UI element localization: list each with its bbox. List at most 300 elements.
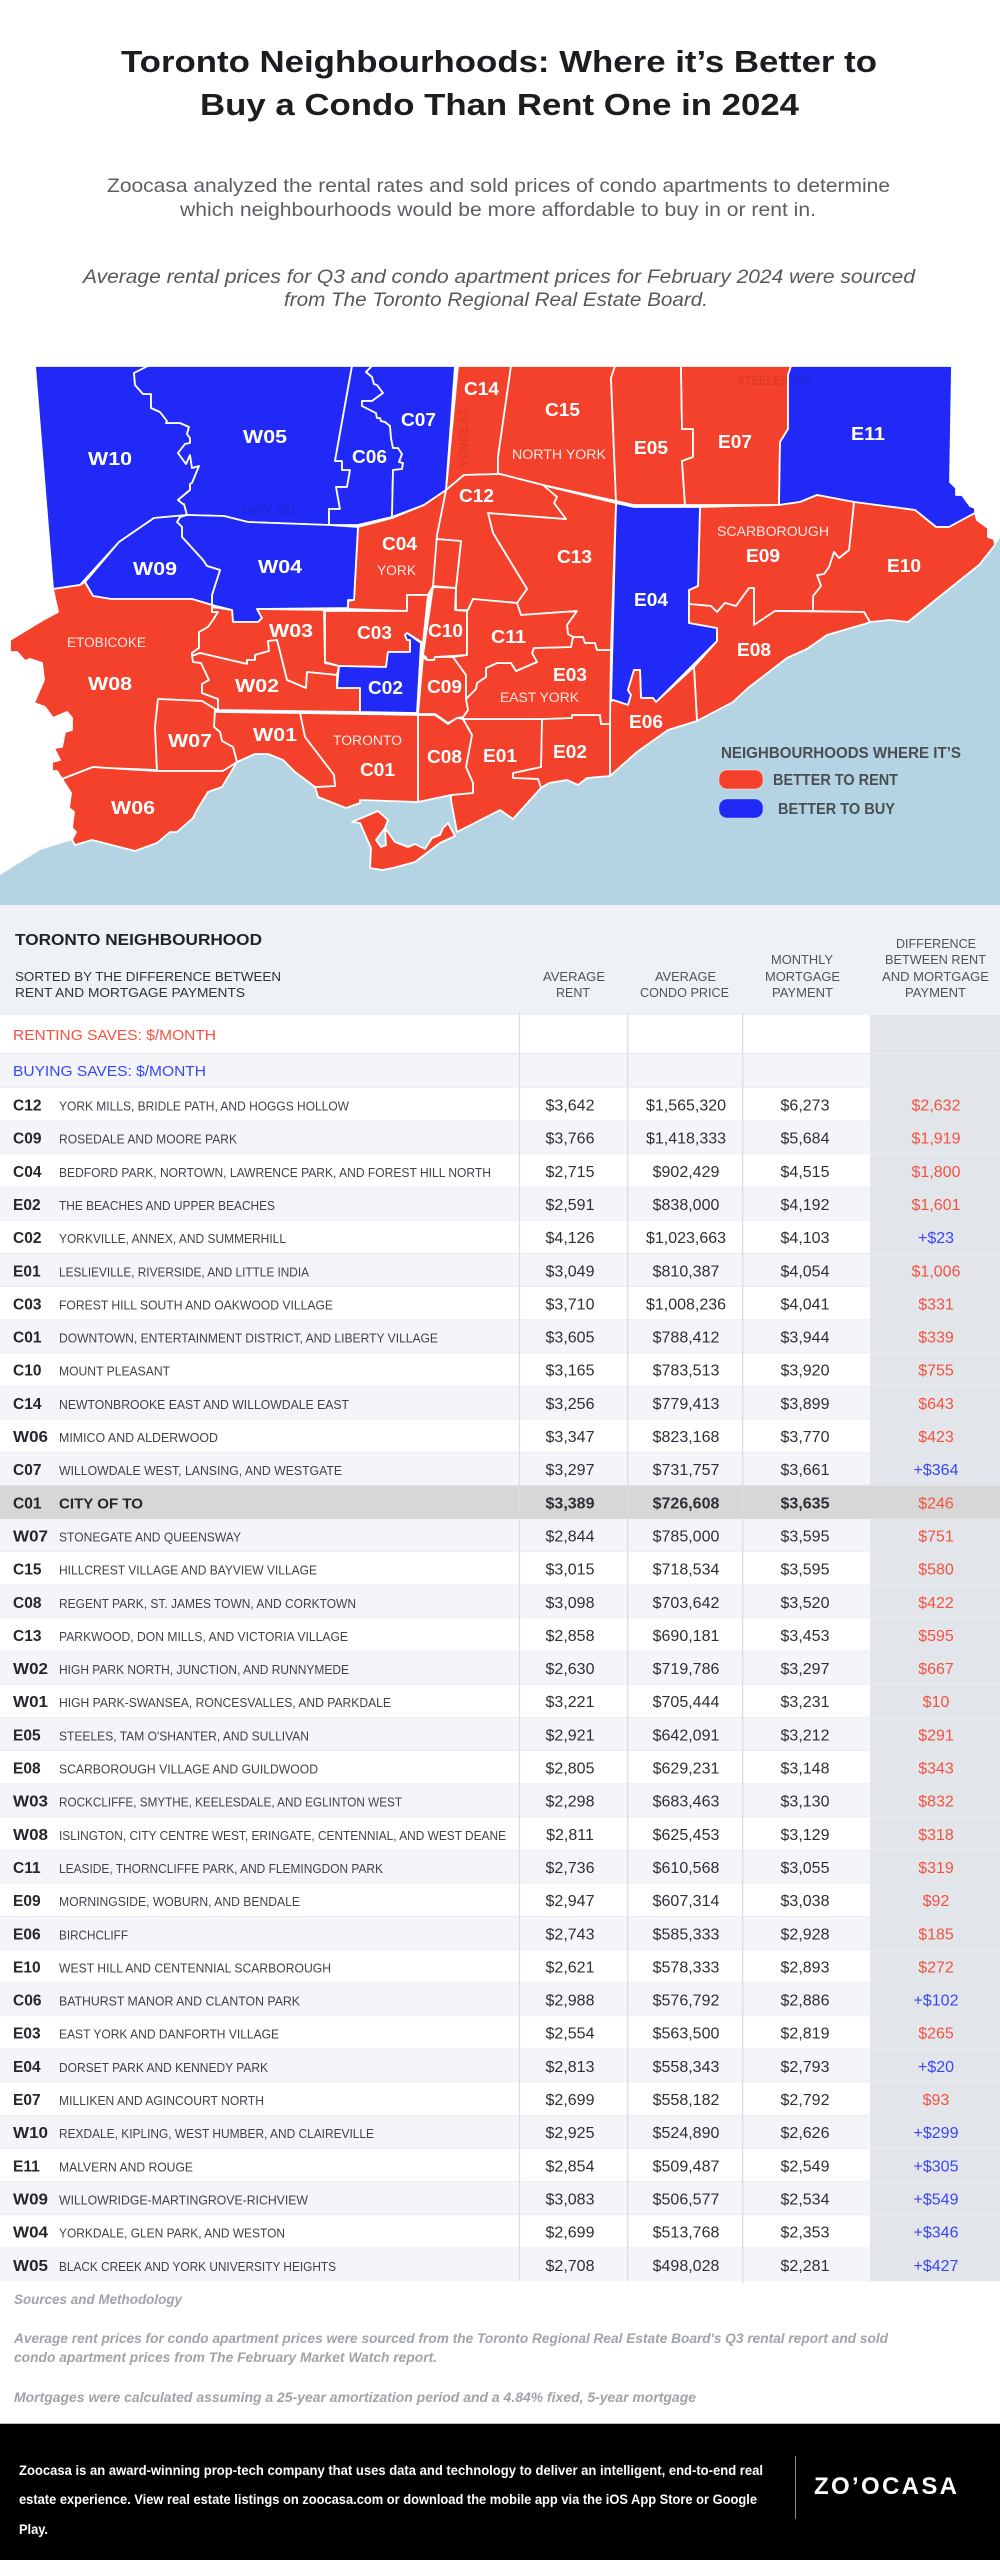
- region: W06: [62, 762, 237, 851]
- row: E06: $2,743: [546, 1926, 595, 1943]
- row: C13: $2,858: [546, 1628, 595, 1645]
- row: C15: HILLCREST VILLAGE AND BAYVIEW VILLAGE: [59, 1564, 317, 1578]
- row: C15: $3,015: [546, 1562, 595, 1579]
- row: E10: [0, 1950, 1000, 1983]
- row: E07: MILLIKEN AND AGINCOURT NORTH: [59, 2094, 264, 2108]
- neighbourhood code labels: C04: [382, 534, 417, 554]
- row: W07: STONEGATE AND QUEENSWAY: [59, 1530, 242, 1544]
- row: W04: +$346: [914, 2225, 959, 2242]
- row: C15: C15: [13, 1562, 42, 1579]
- neighbourhood code labels: C11: [491, 627, 526, 647]
- row: C06: C06: [13, 1993, 42, 2010]
- row: E01: LESLIEVILLE, RIVERSIDE, AND LITTLE INDIA: [59, 1265, 310, 1279]
- row: W08: [0, 1817, 1000, 1850]
- map legend: BETTER TO RENT: [773, 772, 898, 789]
- row: E01: $4,054: [781, 1263, 830, 1280]
- region: C04: [348, 490, 446, 611]
- neighbourhood code labels: E02: [553, 742, 587, 762]
- row: renting saves key: RENTING SAVES: $/MONTH: [13, 1027, 216, 1044]
- row: E08: E08: [13, 1760, 41, 1778]
- row: W01: $3,221: [546, 1694, 595, 1711]
- row: W05: +$427: [914, 2258, 959, 2275]
- row: C03: [0, 1287, 1000, 1320]
- source note: Average rental prices for Q3 and condo apartment prices for February 2024 were sourced: [82, 266, 916, 288]
- row: W05: $2,281: [781, 2258, 830, 2275]
- table header: SORTED BY THE DIFFERENCE BETWEEN: [15, 969, 281, 984]
- neighbourhood code labels: C13: [557, 547, 592, 567]
- neighbourhood code labels: W06: [111, 798, 155, 818]
- region: W08: [10, 582, 218, 779]
- region: C06: [329, 366, 403, 525]
- row: C12: C12: [13, 1098, 41, 1114]
- region: E10: [813, 502, 995, 622]
- row: C07: [0, 1453, 1000, 1486]
- neighbourhood code labels: C01: [360, 760, 395, 780]
- row: W06: $823,168: [653, 1429, 719, 1446]
- table header: RENT AND MORTGAGE PAYMENTS: [15, 985, 245, 1000]
- intro text: Zoocasa analyzed the rental rates and sold prices of condo apartments to determine: [107, 175, 890, 197]
- row: E05: $2,921: [546, 1727, 595, 1744]
- intro text: which neighbourhoods would be more affordable to buy in or rent in.: [179, 199, 816, 221]
- row: city of Toronto total: $3,389: [546, 1495, 595, 1512]
- row: C01: C01: [13, 1330, 42, 1347]
- row: C08: $422: [918, 1595, 954, 1612]
- row: C03: C03: [13, 1296, 42, 1313]
- row: E08: $343: [918, 1760, 954, 1778]
- neighbourhood code labels: W03: [269, 621, 313, 641]
- row: C01: $339: [918, 1330, 954, 1347]
- row: W10: $2,925: [546, 2125, 595, 2142]
- row: C01: [0, 1320, 1000, 1353]
- row: city of Toronto total: C01: [13, 1495, 42, 1512]
- row: C08: $3,520: [781, 1595, 830, 1612]
- row: C11: $2,736: [546, 1860, 595, 1877]
- row: E08: SCARBOROUGH VILLAGE AND GUILDWOOD: [59, 1762, 318, 1776]
- table header: MONTHLY: [771, 952, 833, 967]
- neighbourhood code labels: W09: [133, 559, 177, 579]
- row: C14: $643: [918, 1396, 954, 1413]
- row: E10: $578,333: [653, 1959, 719, 1976]
- row: C04: $1,800: [912, 1164, 961, 1181]
- neighbourhood code labels: E08: [737, 640, 771, 660]
- row: C15: $580: [918, 1562, 954, 1579]
- table header: [0, 905, 1000, 1015]
- row: E10: E10: [13, 1959, 41, 1976]
- neighbourhood code labels: C07: [401, 410, 436, 430]
- region: W05: [134, 366, 352, 525]
- neighbourhood code labels: C15: [545, 400, 580, 420]
- row: W01: $3,231: [781, 1694, 830, 1711]
- sources and methodology: [13, 2292, 889, 2405]
- row: C10: $755: [918, 1363, 954, 1380]
- row: E07: $558,182: [653, 2092, 719, 2109]
- row: C04: $4,515: [781, 1164, 830, 1181]
- row: C06: $2,988: [546, 1993, 595, 2010]
- region: E11: [779, 366, 975, 527]
- row: E01: [0, 1254, 1000, 1287]
- row: C02: $4,126: [546, 1230, 595, 1247]
- neighbourhood code labels: W02: [235, 676, 279, 696]
- source note: [82, 266, 916, 311]
- row: C06: $576,792: [653, 1993, 719, 2010]
- table header: PAYMENT: [772, 985, 833, 1000]
- row: E10: WEST HILL AND CENTENNIAL SCARBOROUGH: [59, 1961, 331, 1975]
- table header: PAYMENT: [905, 985, 966, 1000]
- row: W06: $423: [918, 1429, 954, 1446]
- district labels: ETOBICOKE: [67, 635, 146, 650]
- row: C07: C07: [13, 1462, 41, 1479]
- row: C06: $2,886: [781, 1993, 830, 2010]
- row: C07: $731,757: [653, 1462, 719, 1479]
- row: C09: C09: [13, 1131, 42, 1148]
- row: E09: MORNINGSIDE, WOBURN, AND BENDALE: [59, 1895, 300, 1909]
- row: city of Toronto total: CITY OF TO: [59, 1495, 143, 1512]
- row: W05: W05: [13, 2258, 48, 2275]
- row: W02: HIGH PARK NORTH, JUNCTION, AND RUNNYMEDE: [59, 1663, 349, 1677]
- row: C11: LEASIDE, THORNCLIFFE PARK, AND FLEMINGDON PARK: [59, 1862, 384, 1876]
- row: W02: $2,630: [546, 1661, 595, 1678]
- row: W02: $3,297: [781, 1661, 830, 1678]
- row: E04: $2,793: [781, 2059, 830, 2076]
- row: W10: $2,626: [781, 2125, 830, 2142]
- region: C05 unnamed block: [433, 539, 461, 588]
- neighbourhood code labels: C02: [368, 678, 403, 698]
- row: C12: [0, 1088, 1000, 1121]
- row: C12: $2,632: [912, 1098, 961, 1114]
- row: E09: $2,947: [546, 1893, 595, 1910]
- row: C12: $6,273: [781, 1098, 830, 1114]
- row: C11: [0, 1850, 1000, 1884]
- region: E01: [451, 719, 542, 832]
- row: E01: $1,006: [912, 1263, 961, 1280]
- row: W04: $2,699: [546, 2225, 595, 2242]
- row: buying saves key: BUYING SAVES: $/MONTH: [13, 1063, 206, 1080]
- neighbourhood code labels: W10: [88, 449, 132, 469]
- row: C10: [0, 1353, 1000, 1386]
- row: C03: $1,008,236: [646, 1296, 726, 1313]
- row: W07: W07: [13, 1528, 48, 1545]
- neighbourhood code labels: W08: [88, 674, 132, 694]
- table header: AVERAGE: [543, 969, 605, 984]
- row: E03: E03: [13, 2026, 41, 2043]
- row: C09: $1,418,333: [646, 1131, 726, 1148]
- row: E11: [0, 2149, 1000, 2182]
- row: C09: $3,766: [546, 1131, 595, 1148]
- row: W09: +$549: [914, 2191, 959, 2208]
- row: C09: $1,919: [912, 1131, 961, 1148]
- map legend: [719, 745, 961, 818]
- region: C09: [418, 657, 468, 723]
- row: E02: [0, 1187, 1000, 1221]
- neighbourhood code labels: E04: [634, 590, 668, 610]
- row: C12: $1,565,320: [646, 1098, 726, 1114]
- row: E04: DORSET PARK AND KENNEDY PARK: [59, 2061, 269, 2075]
- row: C08: $3,098: [546, 1595, 595, 1612]
- row: C02: $4,103: [781, 1230, 830, 1247]
- row: W09: WILLOWRIDGE-MARTINGROVE-RICHVIEW: [59, 2193, 308, 2207]
- row: W10: [0, 2116, 1000, 2149]
- row: C06: +$102: [914, 1993, 959, 2010]
- row: E05: $642,091: [653, 1727, 719, 1744]
- row: C03: $331: [918, 1296, 954, 1313]
- row: C14: NEWTONBROOKE EAST AND WILLOWDALE EAST: [59, 1398, 349, 1412]
- row: W07: $2,844: [546, 1528, 595, 1545]
- about Zoocasa text: Zoocasa is an award-winning prop-tech company that uses data and technology to deliver an intelligent, end-to-end real: [19, 2463, 763, 2478]
- row: E02: $4,192: [781, 1197, 830, 1214]
- row: C14: [0, 1386, 1000, 1420]
- row: W05: $498,028: [653, 2258, 719, 2275]
- table header: AVERAGE: [655, 969, 716, 984]
- row: C11: $3,055: [781, 1860, 830, 1877]
- row: C01: $3,944: [781, 1330, 830, 1347]
- row: C10: $783,513: [653, 1363, 719, 1380]
- row: C13: $595: [918, 1628, 954, 1645]
- region: C12: [436, 474, 566, 610]
- row: W10: +$299: [914, 2125, 959, 2142]
- row: C03: $4,041: [781, 1296, 830, 1313]
- row: W10: $524,890: [653, 2125, 719, 2142]
- about Zoocasa text: [19, 2463, 763, 2537]
- row: E05: [0, 1718, 1000, 1751]
- row: W03: $3,130: [781, 1794, 830, 1811]
- row: C02: $1,023,663: [646, 1230, 726, 1247]
- row: C07: WILLOWDALE WEST, LANSING, AND WESTGATE: [59, 1464, 342, 1478]
- row: W06: [0, 1420, 1000, 1453]
- row: C06: BATHURST MANOR AND CLANTON PARK: [59, 1995, 301, 2009]
- row: C13: $690,181: [653, 1628, 719, 1645]
- faint road labels: STEELES AVE: [737, 373, 813, 388]
- map legend: NEIGHBOURHOODS WHERE IT’S: [721, 745, 961, 762]
- sources and methodology: Average rent prices for condo apartment prices were sourced from the Toronto Regional Real Estate Board's Q3 rental report and sold: [13, 2331, 889, 2346]
- region: Toronto Islands: [352, 811, 455, 870]
- row: E01: $3,049: [546, 1263, 595, 1280]
- row: W06: $3,770: [781, 1429, 830, 1446]
- row: E02: $2,591: [546, 1197, 595, 1214]
- region: C15: [498, 366, 616, 501]
- region: E07: [681, 366, 791, 505]
- row: W04: $513,768: [653, 2225, 719, 2242]
- neighbourhood code labels: C06: [352, 447, 387, 467]
- region: E06: [610, 667, 697, 776]
- row: renting saves key: [0, 1015, 1000, 1053]
- row: E07: $2,792: [781, 2092, 830, 2109]
- district labels: [67, 447, 829, 748]
- row: E09: $607,314: [653, 1893, 719, 1910]
- row: E06: $185: [918, 1926, 954, 1943]
- row: C08: $703,642: [653, 1595, 719, 1612]
- row: E04: E04: [13, 2059, 41, 2076]
- row: C09: [0, 1121, 1000, 1154]
- row: E08: [0, 1751, 1000, 1784]
- row: C12: YORK MILLS, BRIDLE PATH, AND HOGGS HOLLOW: [59, 1100, 349, 1114]
- row: W01: $705,444: [653, 1694, 719, 1711]
- region: W03: [192, 607, 339, 688]
- neighbourhood code labels: W04: [258, 557, 302, 577]
- row: C13: C13: [13, 1628, 42, 1645]
- neighbourhood code labels: E09: [746, 546, 780, 566]
- row: C13: $3,453: [781, 1628, 830, 1645]
- district labels: YORK: [377, 563, 416, 578]
- row: E08: $2,805: [546, 1760, 595, 1778]
- neighbourhood code labels: E11: [851, 424, 885, 444]
- row: E11: $509,487: [653, 2158, 719, 2175]
- row: W03: $832: [918, 1794, 954, 1811]
- row: E03: $2,819: [781, 2026, 830, 2043]
- row: W07: $3,595: [781, 1528, 830, 1545]
- row: W03: [0, 1784, 1000, 1817]
- neighbourhood code labels: C10: [428, 621, 463, 641]
- row: E06: $2,928: [781, 1926, 830, 1943]
- row: E01: $810,387: [653, 1263, 719, 1280]
- row: W08: W08: [13, 1827, 48, 1844]
- row: E02: THE BEACHES AND UPPER BEACHES: [59, 1199, 275, 1213]
- row: C11: $610,568: [653, 1860, 719, 1877]
- row: city of Toronto total: $246: [918, 1495, 954, 1512]
- row: W06: W06: [13, 1429, 48, 1446]
- row: W02: [0, 1652, 1000, 1685]
- row: W03: ROCKCLIFFE, SMYTHE, KEELESDALE, AND EGLINTON WEST: [59, 1796, 402, 1810]
- row: W09: W09: [13, 2191, 48, 2208]
- row: C08: [0, 1585, 1000, 1618]
- faint road labels: HWY 401: [242, 503, 297, 518]
- row: C10: $3,920: [781, 1363, 830, 1380]
- row: E03: $563,500: [653, 2026, 719, 2043]
- district labels: NORTH YORK: [512, 447, 606, 462]
- row: C01: $788,412: [653, 1330, 719, 1347]
- region: E05: [611, 366, 693, 505]
- neighbourhood code labels: C12: [459, 486, 494, 506]
- district labels: EAST YORK: [500, 690, 579, 705]
- region: C08: [418, 715, 473, 802]
- region: C10: [423, 587, 467, 660]
- row: E03: $265: [918, 2026, 954, 2043]
- row: C14: C14: [13, 1396, 42, 1413]
- row: W07: $785,000: [653, 1528, 719, 1545]
- table header: MORTGAGE: [765, 969, 840, 984]
- region: C01: [300, 713, 418, 808]
- neighbourhood code labels: C09: [427, 677, 462, 697]
- row: E03: EAST YORK AND DANFORTH VILLAGE: [59, 2028, 279, 2042]
- title: [121, 44, 877, 122]
- row: C01: DOWNTOWN, ENTERTAINMENT DISTRICT, AND LIBERTY VILLAGE: [59, 1332, 438, 1346]
- row: E02: $838,000: [653, 1197, 719, 1214]
- region: C03: [325, 595, 428, 667]
- row: W02: $667: [918, 1661, 954, 1678]
- table: [0, 905, 1000, 2283]
- row: C12: $3,642: [546, 1098, 595, 1114]
- region: W02: [192, 640, 360, 712]
- row: E07: E07: [13, 2092, 41, 2109]
- row: C04: C04: [13, 1164, 42, 1181]
- row: city of Toronto total: [0, 1486, 1000, 1519]
- neighbourhood code labels: E07: [718, 432, 752, 452]
- row: E09: $3,038: [781, 1893, 830, 1910]
- footer: [0, 2423, 1000, 2560]
- table header: CONDO PRICE: [640, 985, 729, 1000]
- region: C13: [488, 485, 616, 650]
- row: C06: [0, 1983, 1000, 2016]
- row: E05: $3,212: [781, 1727, 830, 1744]
- row: C10: MOUNT PLEASANT: [59, 1365, 170, 1379]
- region: E03: [463, 637, 611, 724]
- title: Buy a Condo Than Rent One in 2024: [200, 87, 800, 122]
- title: Toronto Neighbourhoods: Where it’s Better to: [121, 44, 877, 79]
- district labels: SCARBOROUGH: [717, 524, 829, 539]
- row: C09: $5,684: [781, 1131, 830, 1148]
- region: C11: [453, 599, 577, 699]
- row: C04: $2,715: [546, 1164, 595, 1181]
- row: C14: $779,413: [653, 1396, 719, 1413]
- row: E02: $1,601: [912, 1197, 961, 1214]
- neighbourhood code labels: C03: [357, 623, 392, 643]
- table header: BETWEEN RENT: [885, 952, 986, 967]
- faint road labels: [242, 373, 813, 518]
- row: E05: E05: [13, 1727, 41, 1744]
- row: W05: BLACK CREEK AND YORK UNIVERSITY HEIGHTS: [59, 2260, 336, 2274]
- row: C15: [0, 1552, 1000, 1585]
- table header: DIFFERENCE: [896, 936, 976, 951]
- row: C02: YORKVILLE, ANNEX, AND SUMMERHILL: [59, 1232, 286, 1246]
- row: W03: $2,298: [546, 1794, 595, 1811]
- row: W06: $3,347: [546, 1429, 595, 1446]
- row: W08: $318: [918, 1827, 954, 1844]
- region: E04: [611, 503, 717, 705]
- row: E09: [0, 1884, 1000, 1917]
- region: W09: [85, 515, 220, 605]
- row: C13: [0, 1618, 1000, 1652]
- row: E10: $272: [918, 1959, 954, 1976]
- row: E08: $629,231: [653, 1760, 719, 1778]
- row: C04: [0, 1154, 1000, 1187]
- row: C10: C10: [13, 1363, 41, 1380]
- row: C02: C02: [13, 1230, 41, 1247]
- row: E10: $2,621: [546, 1959, 595, 1976]
- row: W01: HIGH PARK-SWANSEA, RONCESVALLES, AND PARKDALE: [59, 1696, 391, 1710]
- row: W08: $2,811: [546, 1827, 594, 1844]
- row: C02: +$23: [918, 1230, 954, 1247]
- row: city of Toronto total: $726,608: [653, 1495, 719, 1512]
- row: E02: E02: [13, 1197, 41, 1214]
- neighbourhood code labels: C08: [427, 747, 462, 767]
- row: C15: $718,534: [653, 1562, 719, 1579]
- map legend: BETTER TO BUY: [778, 801, 895, 818]
- neighbourhood code labels: [88, 379, 921, 818]
- row: W02: $719,786: [653, 1661, 719, 1678]
- row: W03: W03: [13, 1794, 48, 1811]
- row: E05: STEELES, TAM O'SHANTER, AND SULLIVAN: [59, 1729, 309, 1743]
- row: W04: YORKDALE, GLEN PARK, AND WESTON: [59, 2227, 285, 2241]
- row: W05: [0, 2248, 1000, 2281]
- neighbourhood code labels: E01: [483, 746, 517, 766]
- row: E07: [0, 2082, 1000, 2116]
- region: C02: [337, 633, 421, 713]
- row: C07: +$364: [914, 1462, 959, 1479]
- row: E04: [0, 2049, 1000, 2082]
- row: W07: [0, 1519, 1000, 1552]
- row: W08: $625,453: [653, 1827, 719, 1844]
- table header: TORONTO NEIGHBOURHOOD: [15, 932, 262, 949]
- row: E07: $93: [923, 2092, 949, 2109]
- row: E03: [0, 2016, 1000, 2049]
- row: C08: REGENT PARK, ST. JAMES TOWN, AND CORKTOWN: [59, 1597, 356, 1611]
- neighbourhood code labels: W01: [253, 725, 297, 745]
- table header: AND MORTGAGE: [882, 969, 989, 984]
- row: W09: $3,083: [546, 2191, 595, 2208]
- row: E01: E01: [13, 1263, 41, 1280]
- region: W10: [35, 366, 199, 589]
- row: E11: E11: [13, 2158, 40, 2175]
- faint road labels: YONGE ST: [456, 408, 471, 467]
